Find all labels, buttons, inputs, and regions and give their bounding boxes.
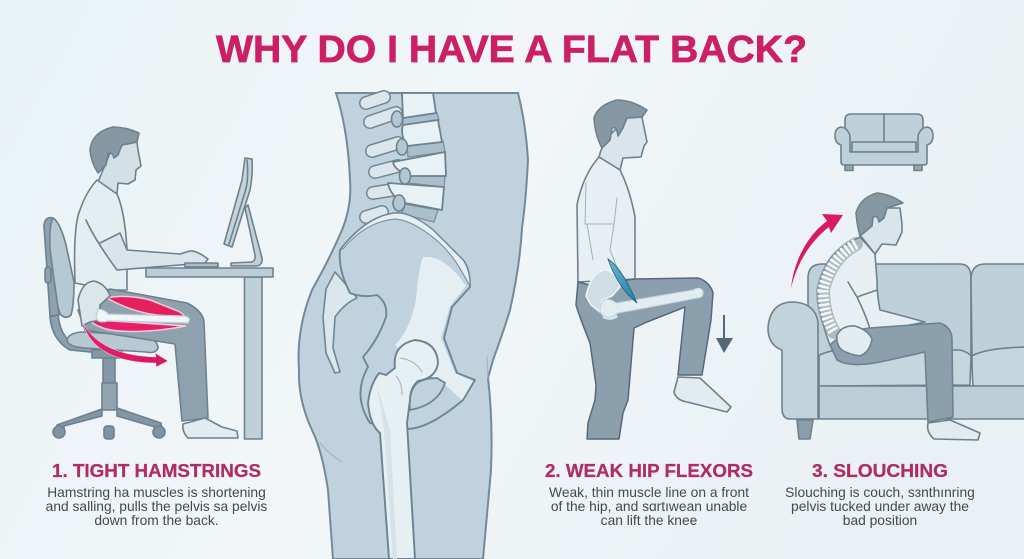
text block: tight hamstrings: down from the back. (94, 513, 219, 528)
pelvis (340, 213, 475, 429)
title: WHY DO I HAVE A FLAT BACK? (216, 29, 807, 71)
body creases (320, 357, 488, 462)
spine: discs (402, 113, 445, 222)
icon: large sofa (768, 264, 1024, 439)
text block: slouching: pelvis tucked under away the (791, 499, 969, 514)
icon: office chair (44, 218, 165, 439)
anatomy: pelvis, femur and tight hamstrings (78, 281, 189, 331)
obturator opening (410, 378, 445, 410)
panel: tight hamstrings illustration (44, 127, 273, 439)
spine: vertebral bodies (388, 93, 446, 210)
figure: seated man (75, 127, 238, 438)
body silhouette (299, 93, 528, 559)
icon: desk (146, 268, 273, 439)
sacrum and coccyx (323, 272, 357, 373)
figure: standing man (576, 100, 731, 439)
panel: central hip and spine anatomy (299, 93, 528, 559)
anatomy: weak hip flexor muscle (608, 259, 637, 303)
pelvis: light bone areas (395, 257, 473, 400)
figure: slouching man (818, 193, 980, 440)
anatomy: pelvis and femur (586, 270, 703, 320)
panel: weak hip flexors illustration (576, 100, 733, 439)
arrow: upward curve (791, 214, 843, 288)
arrow: hamstring pull (83, 323, 168, 367)
heading: weak hip flexors: 2. WEAK HIP FLEXORS (545, 461, 753, 481)
femoral shaft shading (377, 385, 397, 559)
spine: spinous processes (366, 97, 398, 217)
arrow: down (716, 315, 733, 353)
text block: slouching: bad position (843, 513, 917, 528)
heading: slouching: 3. SLOUCHING (812, 461, 948, 481)
text block: tight hamstrings: Hamstring ha muscles is shortening (47, 485, 266, 500)
femur (368, 340, 438, 559)
anatomy: pelvis (837, 326, 872, 356)
text block: weak hip flexors: can lift the knee (601, 513, 698, 528)
panel: slouching illustration (768, 193, 1024, 440)
icon: small couch (835, 114, 933, 170)
icon: computer monitor (224, 158, 262, 266)
text block: slouching: Slouching is couch, sɜnthınring (785, 485, 975, 500)
spine: facet joints (392, 111, 410, 211)
text block: weak hip flexors: Weak, thin muscle line on a front (549, 485, 749, 500)
text block: weak hip flexors: of the hip, and sɑrtıwean unable (551, 499, 748, 514)
anatomy: curved spine (823, 244, 856, 332)
text block: tight hamstrings: and salling, pulls the pelvis sa pelvis (46, 499, 267, 514)
heading: tight hamstrings: 1. TIGHT HAMSTRINGS (52, 461, 261, 481)
